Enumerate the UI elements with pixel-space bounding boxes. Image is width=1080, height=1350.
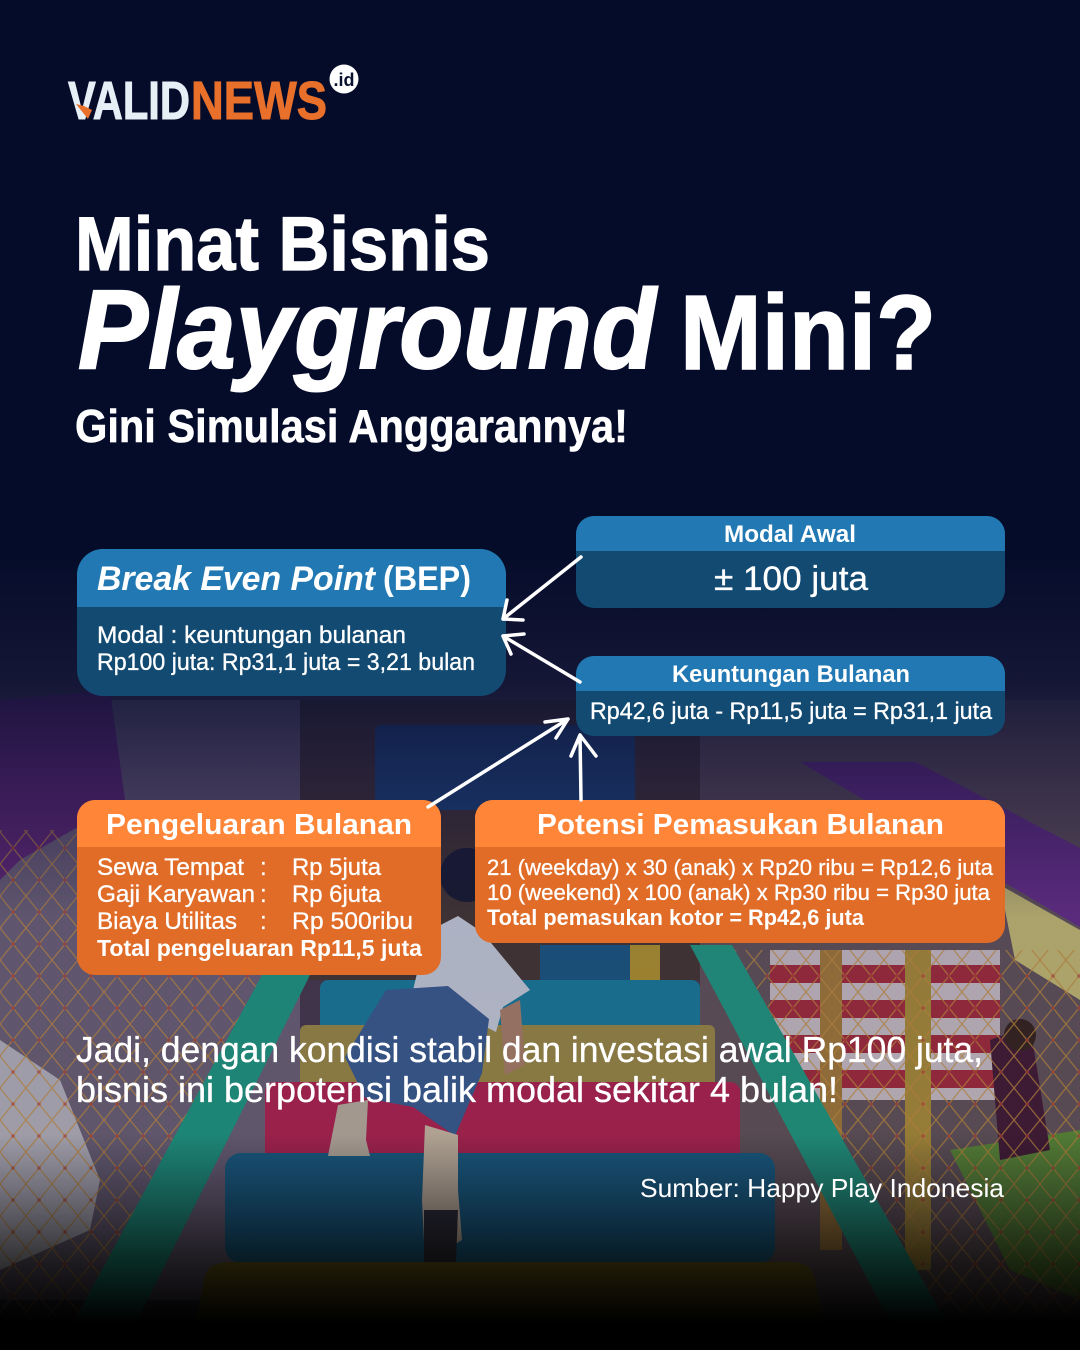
logo: ValidNews.id: NEWS (191, 71, 327, 131)
conclusion text: Jadi, dengan kondisi stabil dan investasi awal Rp100 juta, (76, 1029, 983, 1070)
panel: Pengeluaran Bulanan: Total pengeluaran Rp11,5 juta (97, 935, 422, 961)
panel: Potensi Pemasukan Bulanan (475, 800, 1005, 943)
title: Minat Bisnis (75, 202, 490, 287)
panel: Potensi Pemasukan Bulanan: 21 (weekday) x 30 (anak) x Rp20 ribu = Rp12,6 juta (487, 855, 994, 880)
background photo: child climbing playground steps (0, 560, 1080, 1350)
title: Gini Simulasi Anggarannya! (75, 400, 628, 452)
logo: ValidNews.id: VALID (68, 71, 190, 131)
arrow: Keuntungan Bulanan to BEP (503, 634, 580, 682)
panel: Modal Awal: ± 100 juta (714, 560, 868, 598)
conclusion text (76, 1029, 983, 1110)
panel: Potensi Pemasukan Bulanan: Potensi Pemasukan Bulanan (537, 809, 944, 841)
panel: Pengeluaran Bulanan: Biaya Utilitas (97, 908, 237, 935)
panel: Pengeluaran Bulanan: : (260, 881, 267, 908)
source: Sumber: Happy Play Indonesia (640, 1173, 1005, 1203)
panel: Break Even Point: Modal : keuntungan bulanan (97, 622, 406, 649)
panel: Potensi Pemasukan Bulanan: Total pemasukan kotor = Rp42,6 juta (487, 905, 865, 930)
conclusion text: bisnis ini berpotensi balik modal sekitar 4 bulan! (76, 1069, 838, 1110)
arrow: Modal Awal to BEP (503, 557, 581, 620)
arrow: Pengeluaran to Keuntungan (428, 719, 568, 807)
panel: Pengeluaran Bulanan: : (260, 854, 267, 881)
panel: Break Even Point: (BEP) (383, 560, 471, 598)
panel: Pengeluaran Bulanan (77, 800, 441, 975)
panel: Keuntungan Bulanan: Rp42,6 juta - Rp11,5 juta = Rp31,1 juta (590, 698, 993, 725)
panel: Pengeluaran Bulanan: Rp 500ribu (292, 908, 413, 935)
panel: Pengeluaran Bulanan: Rp 5juta (292, 854, 382, 881)
panel: Pengeluaran Bulanan: Pengeluaran Bulanan (106, 809, 412, 841)
title: Mini? (680, 274, 936, 392)
panel: Modal Awal (576, 516, 1005, 608)
arrow: Pemasukan to Keuntungan (571, 735, 596, 800)
panel: Modal Awal: Modal Awal (724, 521, 856, 548)
panel: Potensi Pemasukan Bulanan: 10 (weekend) x 100 (anak) x Rp30 ribu = Rp30 juta (487, 880, 991, 905)
panel: Pengeluaran Bulanan: : (260, 908, 267, 935)
title: Playground (78, 267, 658, 392)
panel: Pengeluaran Bulanan: Gaji Karyawan (97, 881, 255, 908)
logo: ValidNews.id (68, 64, 358, 131)
panel: Keuntungan Bulanan (576, 656, 1005, 736)
panel: Break Even Point (77, 549, 506, 696)
panel: Pengeluaran Bulanan: Sewa Tempat (97, 854, 244, 881)
logo: ValidNews.id: .id (334, 70, 354, 90)
panel: Pengeluaran Bulanan: Rp 6juta (292, 881, 382, 908)
title (75, 202, 936, 452)
panel: Break Even Point: Break Even Point (97, 560, 377, 598)
panel: Keuntungan Bulanan: Keuntungan Bulanan (672, 661, 910, 688)
panel: Break Even Point: Rp100 juta: Rp31,1 juta = 3,21 bulan (97, 649, 475, 676)
